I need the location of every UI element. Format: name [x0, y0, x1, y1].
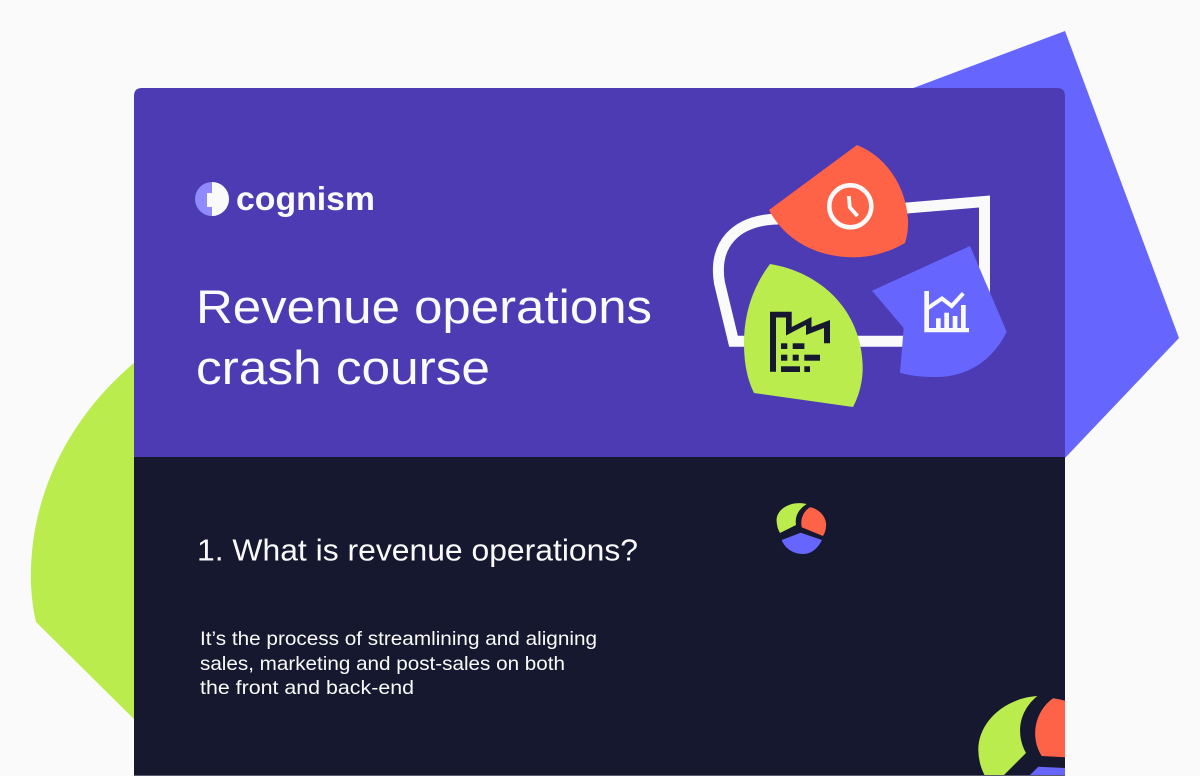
illustration: connected segments: [718, 145, 1007, 407]
section heading: 1. What is revenue operations?: [197, 532, 638, 568]
logo: cognism: [195, 180, 375, 217]
icon: clock: [829, 185, 871, 227]
title: [196, 280, 652, 394]
icon: line and bar chart: [924, 291, 969, 332]
body text: the front and back-end: [200, 677, 414, 699]
body text: It’s the process of streamlining and aligning: [200, 628, 597, 650]
background shape: periwinkle polygon: [900, 31, 1179, 458]
white connector frame: [718, 202, 984, 341]
large pie, cropped: [978, 696, 1065, 776]
body text: sales, marketing and post-sales on both: [200, 653, 565, 675]
small pie icon: [777, 503, 826, 554]
icon: factory: [770, 312, 830, 372]
red segment with clock: [769, 145, 908, 257]
title: crash course: [196, 341, 490, 394]
title: Revenue operations: [196, 280, 652, 333]
logo mark: [195, 182, 229, 216]
panel: dark body: [134, 457, 1065, 776]
background shape: lime blob: [31, 358, 140, 725]
body text: [200, 628, 597, 699]
lime segment with factory: [744, 264, 863, 407]
logo wordmark: cognism: [236, 180, 375, 217]
panel: purple header: [134, 88, 1065, 457]
periwinkle segment with chart: [872, 246, 1007, 377]
